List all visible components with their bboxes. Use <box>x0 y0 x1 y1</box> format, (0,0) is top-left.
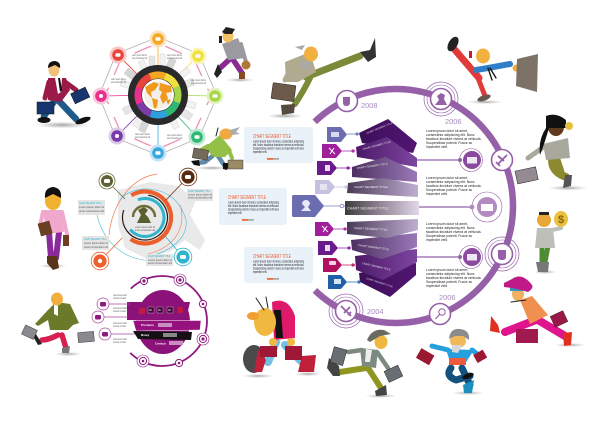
lorem text blocks: imperdiet velit. <box>426 192 448 196</box>
disc: Contacts <box>155 342 167 346</box>
small text blocks: sit amet consect <box>113 309 126 313</box>
node: green <box>188 128 206 146</box>
label: left: CHART SEGMENT TITLE <box>79 201 101 205</box>
year labels: 2004 <box>367 307 383 316</box>
panel: chart segment title A: Suspendisse potenti. Fusce ac imperdiet velit nunc <box>253 146 304 150</box>
chart: 3D purple layered stack <box>345 119 419 297</box>
character: man holding gold dollar <box>533 211 568 274</box>
centre text: Lorem ipsum dolor sit <box>135 225 155 229</box>
disc: Money <box>141 333 150 337</box>
outer ring <box>98 257 226 385</box>
node: orange <box>91 252 109 270</box>
grey text blocks: Lorem ipsum dolor sit <box>111 77 126 81</box>
layer 6: CHART SEGMENT TITLE <box>354 226 388 232</box>
panel: chart segment title A: elit. Nunc faucibus tincidunt viverra at vehicula. <box>253 143 304 147</box>
small text blocks <box>113 293 127 344</box>
panel: chart segment title B <box>219 188 287 225</box>
label: top right: amet consectetur elit <box>188 196 212 200</box>
orange ring <box>109 182 181 253</box>
grey text blocks: amet consectetur elit <box>135 135 150 139</box>
node: pink <box>92 88 110 104</box>
character: hat man with magenta trousers <box>490 277 586 347</box>
layer 1 <box>359 119 417 153</box>
panel: purple timeline ring <box>231 41 561 371</box>
layer 3: CHART SEGMENT TITLE <box>357 162 388 170</box>
black ring <box>128 65 188 125</box>
label: top right <box>187 189 213 201</box>
label: left: amet consectetur elit <box>79 209 104 213</box>
thin arcs <box>97 174 186 261</box>
lorem text blocks: imperdiet velit. <box>426 284 448 288</box>
lorem text blocks: Lorem ipsum dolor sit amet, <box>426 129 468 133</box>
label: left: Lorem ipsum dolor sit <box>79 205 104 209</box>
year labels: 2008 <box>361 101 377 110</box>
lorem text blocks: Suspendisse potenti. Fusce ac <box>426 234 472 238</box>
character: kicking man with red trousers <box>445 35 538 104</box>
small text blocks: Lorem ipsum dolor <box>113 321 127 325</box>
character: leaping man with olive trousers <box>267 38 376 118</box>
mail node bottom <box>458 246 482 268</box>
lorem text blocks: Suspendisse potenti. Fusce ac <box>426 141 472 145</box>
node: blue <box>150 144 166 162</box>
lorem text blocks: consectetur adipiscing elit. Nunc <box>426 272 475 276</box>
layer 9 <box>359 263 416 297</box>
lorem text blocks <box>426 129 481 288</box>
panel: concentric rings with world map <box>78 168 213 270</box>
small text blocks: Lorem ipsum dolor <box>113 293 127 297</box>
spokes <box>101 39 215 153</box>
lorem text blocks: Suspendisse potenti. Fusce ac <box>426 188 472 192</box>
small text blocks: Lorem ipsum dolor <box>113 306 127 310</box>
olive dome with icon <box>133 206 155 223</box>
label: lower left: CHART SEGMENT TITLE <box>84 237 106 241</box>
connector lines to mail nodes <box>415 160 487 257</box>
lorem text blocks: faucibus tincidunt viverra at vehicula. <box>426 230 481 234</box>
small text blocks: Lorem ipsum dolor <box>113 337 127 341</box>
grey text blocks: amet consectetur elit <box>132 56 147 60</box>
character: walker with navy briefcases <box>35 61 91 128</box>
layer 4 <box>347 178 418 197</box>
node: olive <box>99 173 115 189</box>
lorem text blocks: Lorem ipsum dolor sit amet, <box>426 176 468 180</box>
label: lower left: Lorem ipsum dolor sit <box>84 241 108 245</box>
lorem text blocks: Lorem ipsum dolor sit amet, <box>426 222 468 226</box>
grey text blocks: amet consectetur elit <box>191 81 206 85</box>
year labels <box>361 101 461 316</box>
layer 8: CHART SEGMENT TITLE <box>362 262 391 272</box>
panel: chart segment title C <box>244 247 313 283</box>
year labels: 2006 <box>445 117 461 126</box>
small text blocks: sit amet consect <box>113 324 126 328</box>
node: teal <box>174 248 192 266</box>
panel: chart segment title C: imperdiet velit. <box>253 270 267 274</box>
layer 8 <box>355 249 417 280</box>
tag 7 <box>318 241 338 255</box>
label: bottom: Lorem ipsum dolor sit <box>148 258 172 262</box>
lorem text blocks: consectetur adipiscing elit. Nunc <box>426 133 475 137</box>
label: top right: Lorem ipsum dolor sit <box>188 192 212 196</box>
small text blocks: sit amet consect <box>113 340 126 344</box>
node: cup lower right <box>485 237 519 271</box>
panel: chart segment title A: imperdiet velit. <box>253 150 267 154</box>
grey text blocks: amet consectetur elit <box>167 56 182 60</box>
character: big nosed man in pink jacket <box>242 297 322 378</box>
panel: chart segment title C: Lorem ipsum dolor sit amet, consectetur adipiscing <box>253 260 304 264</box>
node: lime <box>206 88 224 104</box>
node: cup 2008 <box>336 90 358 112</box>
tag 5 <box>292 195 324 217</box>
panel: chart segment title A <box>244 127 313 163</box>
grey text blocks: Lorem ipsum dolor sit <box>135 132 150 136</box>
world map silhouette <box>118 182 205 258</box>
globe icon <box>142 79 174 111</box>
connector lines <box>100 177 188 261</box>
disc: 00 <box>158 309 161 312</box>
lorem text blocks: faucibus tincidunt viverra at vehicula. <box>426 276 481 280</box>
disc <box>127 290 201 354</box>
grey text blocks: Lorem ipsum dolor sit <box>167 53 182 57</box>
grey text blocks: Lorem ipsum dolor sit <box>191 78 206 82</box>
lorem text blocks: Suspendisse potenti. Fusce ac <box>426 280 472 284</box>
lorem text blocks: imperdiet velit. <box>426 238 448 242</box>
tag 8 <box>323 258 342 272</box>
ring nodes <box>137 274 209 367</box>
character: woman with olive trousers on phone <box>515 115 588 190</box>
character: pink shirt man with purple trousers <box>38 187 69 270</box>
layer 5 centre: CHART SEGMENT TITLE <box>347 206 389 210</box>
panel: chart segment title B: CHART SEGMENT TITLE <box>228 195 266 201</box>
panel: chart segment title B: imperdiet velit. <box>228 211 242 215</box>
tag 6 <box>315 222 334 236</box>
small text blocks: sit amet consect <box>113 296 126 300</box>
label: left <box>78 200 105 215</box>
node: brown <box>179 168 197 186</box>
label: bottom: CHART SEGMENT TITLE <box>148 254 170 258</box>
label: lower left: amet consectetur elit <box>84 245 108 249</box>
octagon connectors <box>99 37 217 155</box>
lorem text blocks: consectetur adipiscing elit. Nunc <box>426 226 475 230</box>
lorem text blocks: Lorem ipsum dolor sit amet, <box>426 268 468 272</box>
city skyline around ring <box>120 54 196 133</box>
teal ring <box>121 193 169 242</box>
tag 9 <box>328 275 347 289</box>
grey text blocks: amet consectetur elit <box>167 136 182 140</box>
panel: chart segment title B: Lorem ipsum dolor sit amet, consectetur adipiscing <box>228 200 279 204</box>
node: orange <box>150 30 166 48</box>
grey text blocks <box>111 53 206 140</box>
layer 7: CHART SEGMENT TITLE <box>358 243 389 251</box>
panel: globe radial infographic <box>92 30 224 162</box>
lorem text blocks: faucibus tincidunt viverra at vehicula. <box>426 184 481 188</box>
panel: chart segment title B: Suspendisse potenti. Fusce ac imperdiet velit nunc <box>228 208 279 212</box>
layer 6 <box>347 219 418 238</box>
tag 2 <box>322 144 342 158</box>
character: grey haired man in blue jacket <box>416 329 487 395</box>
node: yellow <box>190 48 206 64</box>
character: man on phone with purple trousers <box>214 27 254 82</box>
label: bottom <box>146 254 173 266</box>
layer 4: CHART SEGMENT TITLE <box>354 185 388 189</box>
tag 3 <box>317 161 337 175</box>
node: purple <box>108 128 126 144</box>
ring <box>231 41 561 371</box>
left connector nodes <box>92 298 135 340</box>
character: green jacket man with red trousers <box>21 292 94 356</box>
layer 3 <box>352 157 417 182</box>
node: red <box>110 46 126 64</box>
coloured ring <box>132 69 184 121</box>
year labels: 2006 <box>439 293 455 302</box>
node: plane right <box>492 150 512 170</box>
tag 4 <box>315 180 335 194</box>
panel: chart segment title A: Lorem ipsum dolor sit amet, consectetur adipiscing <box>253 140 304 144</box>
tag 1 <box>327 127 347 142</box>
lorem text blocks: imperdiet velit. <box>426 145 448 149</box>
label: top right: CHART SEGMENT TITLE <box>188 189 210 193</box>
character: man holding gold dollar: $ <box>558 214 564 226</box>
layer 7 <box>351 233 417 259</box>
layer 2 <box>356 137 417 167</box>
node: magnifier <box>430 304 450 324</box>
grey text blocks: Lorem ipsum dolor sit <box>167 133 182 137</box>
character: hat man with olive trousers <box>327 330 403 398</box>
panel: chart segment title B: elit. Nunc faucibus tincidunt viverra at vehicula. <box>228 204 279 208</box>
grey text blocks: amet consectetur elit <box>111 80 126 84</box>
panel: chart segment title C: elit. Nunc faucibus tincidunt viverra at vehicula. <box>253 263 304 267</box>
node: plane lower left <box>329 294 363 328</box>
disc: 00 <box>168 309 171 312</box>
disc: Premium <box>141 323 154 327</box>
layer 9: CHART SEGMENT TITLE <box>366 277 393 289</box>
layer 5 centre <box>345 201 419 215</box>
grey text blocks: Lorem ipsum dolor sit <box>132 53 147 57</box>
node: ring top <box>424 82 458 116</box>
panel: chart segment title C: Suspendisse potenti. Fusce ac imperdiet velit nunc <box>253 266 304 270</box>
tags: left side labels with connectors <box>292 127 360 289</box>
panel: chart segment title C: CHART SEGMENT TITLE <box>253 254 291 260</box>
panel: concentric rings with world map: amet consectetur elit <box>135 228 155 232</box>
disc: 00 <box>149 309 152 312</box>
mail node middle <box>470 192 502 222</box>
label: lower left <box>82 236 109 250</box>
layer 1: CHART SEGMENT TITLE <box>366 122 393 135</box>
dark ring <box>119 191 171 244</box>
lorem text blocks: consectetur adipiscing elit. Nunc <box>426 180 475 184</box>
label: bottom: amet consectetur elit <box>148 261 172 265</box>
character: green jacket man with cases <box>191 127 243 170</box>
mail node top <box>458 148 482 172</box>
layer 2: CHART SEGMENT TITLE <box>362 140 392 151</box>
panel: magenta disc infographic <box>92 257 226 385</box>
lorem text blocks: faucibus tincidunt viverra at vehicula. <box>426 137 481 141</box>
panel: chart segment title A: CHART SEGMENT TITLE <box>253 134 291 140</box>
